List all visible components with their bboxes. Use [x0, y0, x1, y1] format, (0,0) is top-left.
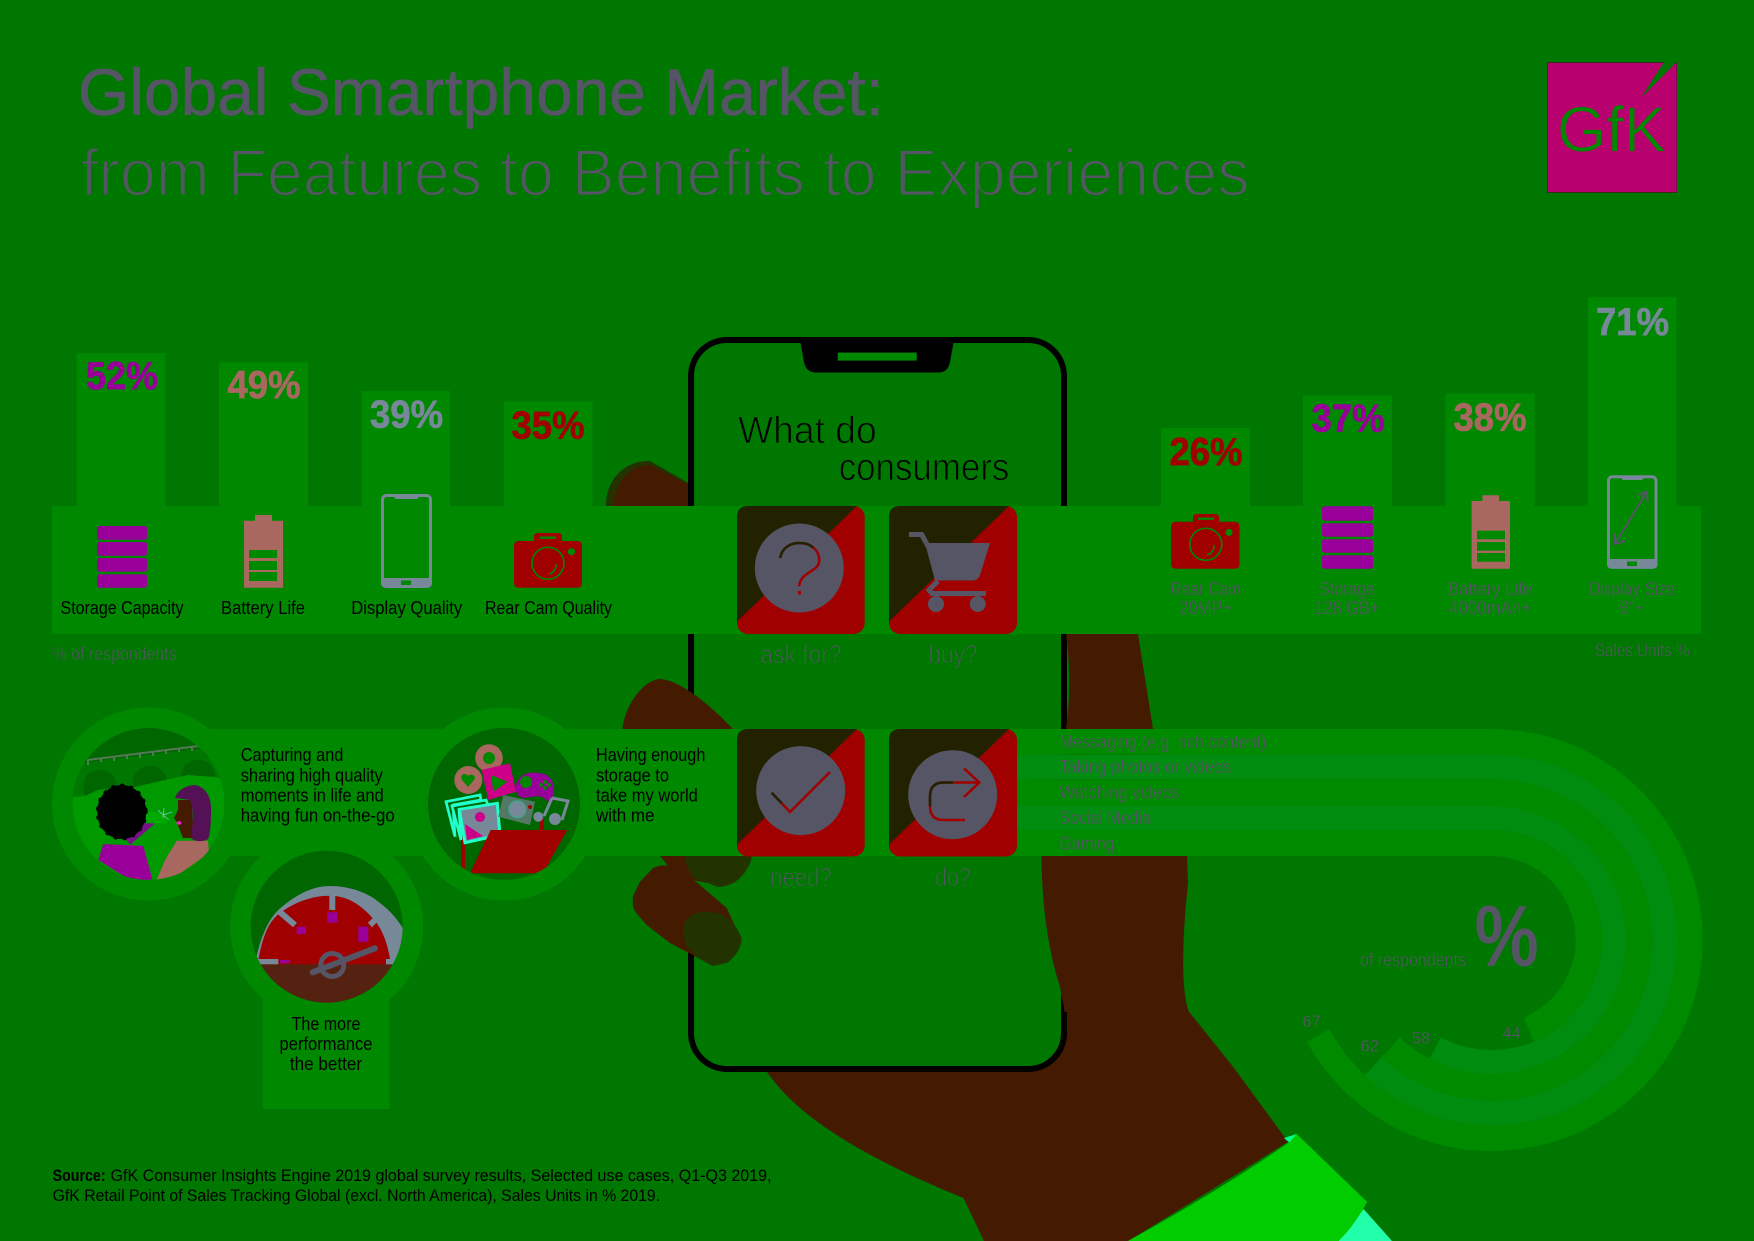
left column: battery life: 49% — [228, 364, 300, 407]
illustration: friends taking a photo — [72, 727, 226, 882]
hand over phone edge — [1041, 620, 1189, 1012]
benefit text: capturing moments: moments in life and — [241, 785, 384, 805]
right column: rear cam — [1170, 431, 1242, 618]
source note — [53, 1166, 772, 1205]
phone outline — [691, 340, 1064, 1069]
left column: storage capacity — [60, 355, 184, 618]
feature band with bars — [52, 297, 1701, 634]
benefit text: storage: Having enough — [596, 745, 705, 765]
percent of respondents note: % — [1475, 889, 1539, 985]
tile: ask for — [737, 506, 865, 669]
left column: display quality: 39% — [370, 394, 443, 437]
arc values — [1302, 1012, 1521, 1056]
arc values: 58 — [1412, 1029, 1430, 1048]
use-case labels: Watching videos — [1060, 782, 1180, 802]
benefit text: performance: The more — [292, 1014, 360, 1034]
right column: display size — [1589, 301, 1675, 618]
source note: Source: — [53, 1166, 106, 1185]
benefit text: storage — [595, 745, 705, 825]
right column: storage: 37% — [1312, 398, 1384, 441]
axis note: sales units: Sales Units % — [1595, 641, 1690, 661]
GfK logo — [1547, 62, 1677, 192]
phone heading: consumers — [839, 447, 1009, 489]
arc values: 67 — [1302, 1012, 1321, 1031]
left column: battery life: Battery Life — [221, 598, 305, 618]
left column: battery life — [221, 364, 305, 618]
right column: display size: Display Size — [1589, 579, 1675, 599]
illustration: performance gauge — [250, 850, 404, 1004]
left column: display quality — [351, 394, 462, 618]
benefit text: capturing moments — [241, 745, 395, 825]
tile: buy — [889, 506, 1017, 669]
benefit text: performance: performance — [280, 1034, 372, 1054]
left column: storage capacity: Storage Capacity — [60, 598, 184, 618]
right column: rear cam: 26% — [1170, 431, 1242, 474]
left column: storage capacity: 52% — [86, 355, 158, 398]
benefit text: performance — [280, 1014, 372, 1074]
right column: rear cam: 20MP+ — [1179, 598, 1232, 618]
title — [78, 55, 1250, 210]
title: from Features to Benefits to Experiences — [80, 136, 1250, 210]
source note: GfK Retail Point of Sales Tracking Global (excl. North America), Sales Units in % 2019. — [53, 1186, 660, 1205]
experience band — [52, 708, 1028, 1109]
right column: battery life — [1448, 397, 1532, 618]
benefit text: capturing moments: having fun on-the-go — [241, 805, 395, 825]
source note: GfK Consumer Insights Engine 2019 global survey results, Selected use cases, Q1-Q3 2019, — [110, 1166, 772, 1185]
illustration: folder of media — [427, 727, 581, 881]
benefit text: performance: the better — [290, 1054, 362, 1074]
sleeve cuff — [1128, 1134, 1392, 1241]
fingertip above top band — [606, 461, 690, 510]
use-case labels: Messaging (e.g. rich content) — [1060, 732, 1266, 752]
axis note: respondents: % of respondents — [53, 644, 177, 664]
left column: rear cam quality: 35% — [512, 405, 584, 448]
tile: need: need? — [770, 862, 832, 892]
title: Global Smartphone Market: — [78, 55, 884, 129]
use-case arc chart — [1017, 742, 1690, 1138]
right column: storage — [1312, 398, 1384, 618]
benefit text: capturing moments: Capturing and — [241, 745, 343, 765]
right column: battery life: Battery Life — [1448, 579, 1532, 599]
fingers gripping phone — [622, 679, 752, 966]
use-case labels — [1060, 732, 1266, 854]
phone heading — [738, 410, 1009, 489]
use-case labels: Taking photos or videos — [1060, 757, 1231, 777]
tile: ask for: ask for? — [760, 639, 842, 669]
left column: display quality: Display Quality — [351, 598, 462, 618]
use-case labels: Gaming — [1060, 834, 1114, 854]
percent of respondents note: of respondents — [1360, 950, 1466, 970]
right column: battery life: 38% — [1454, 397, 1526, 440]
use-case labels: Social Media — [1060, 808, 1152, 828]
left column: rear cam quality: Rear Cam Quality — [485, 598, 612, 618]
percent of respondents note — [1360, 889, 1539, 985]
right column: storage: Storage — [1320, 579, 1374, 599]
tile: do — [889, 729, 1017, 892]
right column: battery life: 4000mAh+ — [1449, 598, 1531, 618]
tile: need — [737, 729, 865, 892]
tile: do: do? — [935, 862, 971, 892]
right column: display size: 6"+ — [1620, 598, 1644, 618]
right column: rear cam: Rear Cam — [1171, 579, 1241, 599]
tile: buy: buy? — [928, 639, 978, 669]
benefit text: storage: storage to — [596, 765, 669, 785]
left column: rear cam quality — [485, 405, 612, 618]
phone heading: What do — [738, 410, 877, 452]
arc values: 44 — [1502, 1024, 1521, 1043]
right column: storage: 128 GB+ — [1314, 598, 1380, 618]
GfK logo: GfK — [1557, 94, 1666, 166]
hand palm behind phone — [740, 1012, 1288, 1241]
benefit text: storage: with me — [595, 805, 654, 825]
benefit text: storage: take my world — [596, 785, 698, 805]
right column: display size: 71% — [1596, 301, 1669, 344]
benefit text: capturing moments: sharing high quality — [241, 765, 383, 785]
arc values: 62 — [1361, 1037, 1379, 1056]
